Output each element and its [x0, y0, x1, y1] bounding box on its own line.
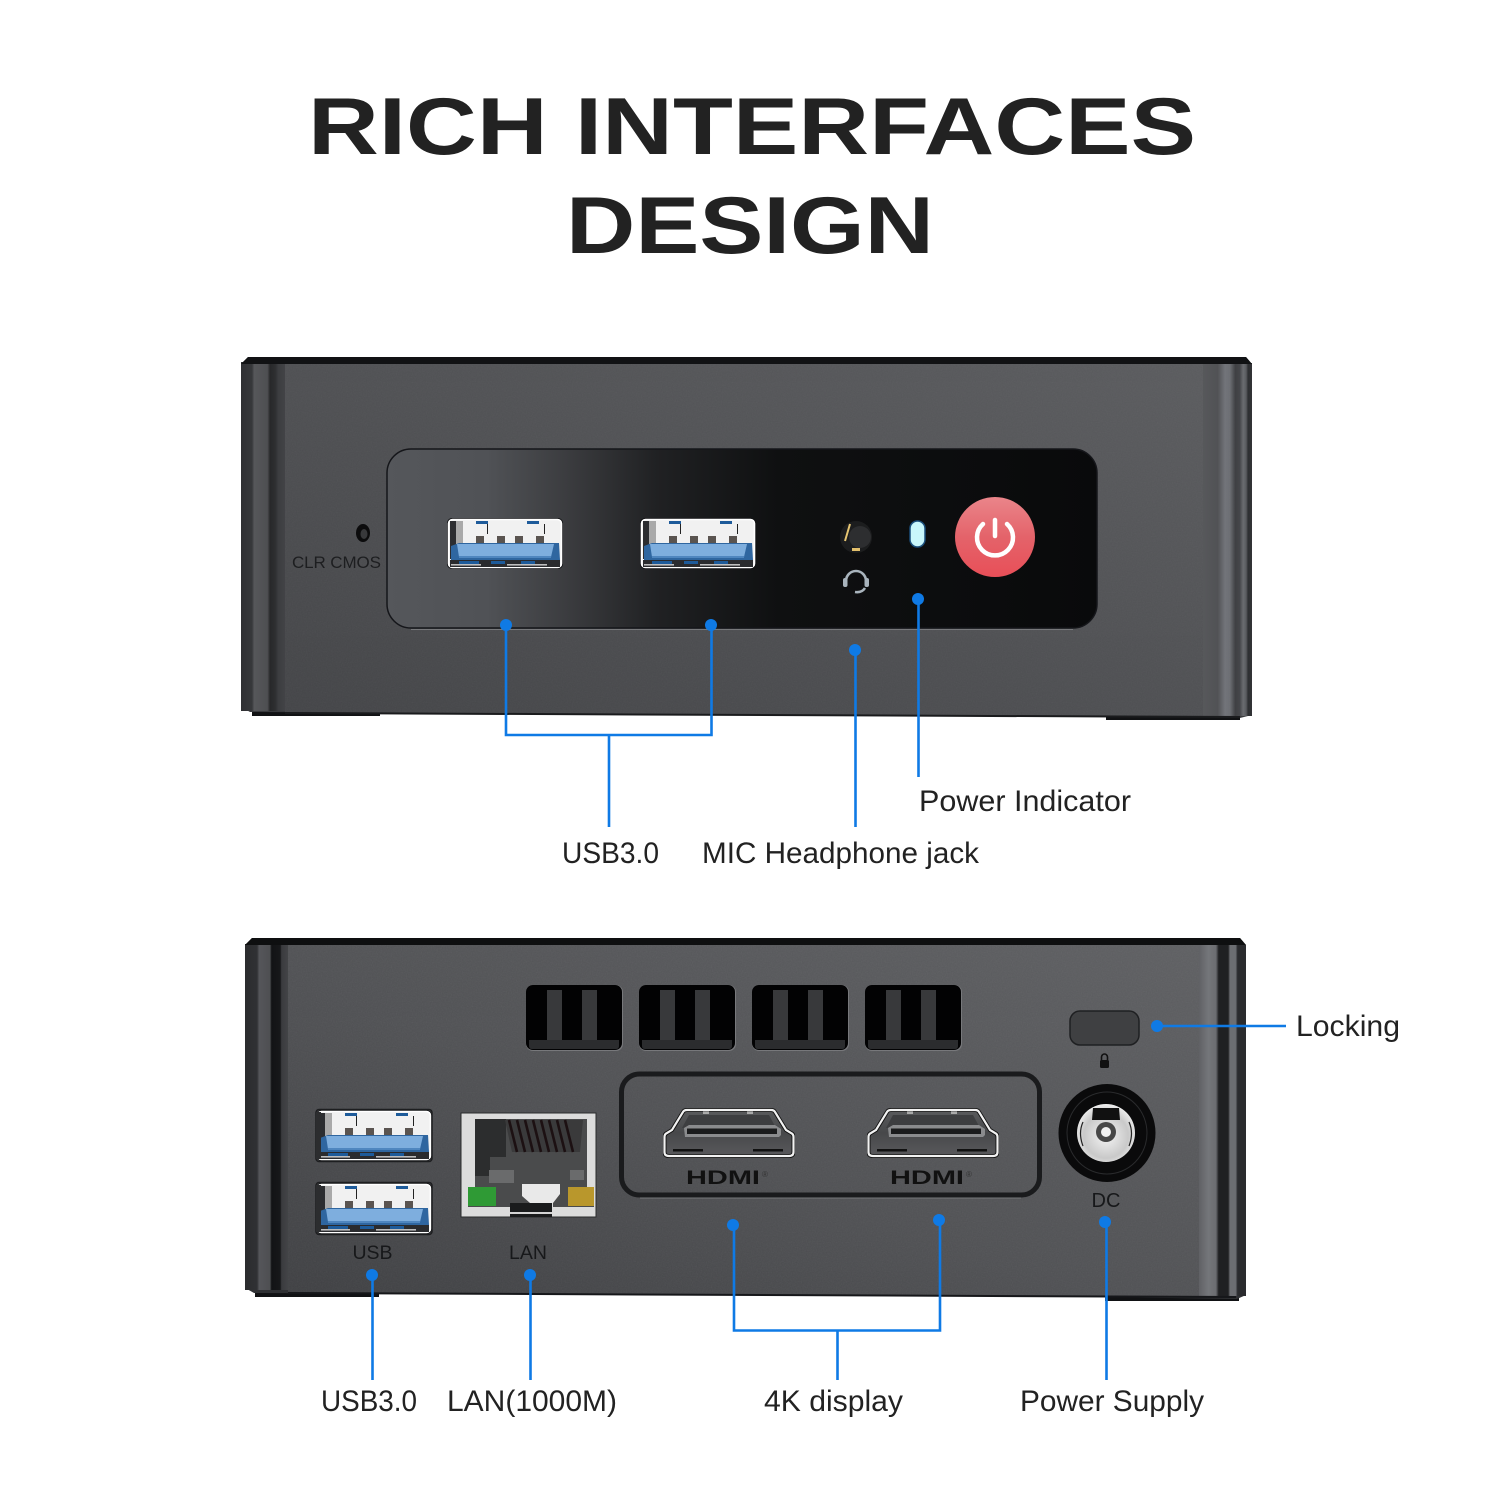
- usb port 1: [447, 518, 563, 569]
- hdmi port 1: HDMI: [686, 1168, 760, 1189]
- callout: 4k display: [727, 1214, 945, 1418]
- lan silk label: LAN: [509, 1242, 547, 1264]
- usb port 2: [640, 518, 756, 569]
- lan port: [461, 1113, 596, 1217]
- rear chassis body: [245, 938, 1246, 1299]
- callout: mic headphone jack: [702, 644, 980, 870]
- callout: mic headphone jack: MIC Headphone jack: [702, 837, 980, 870]
- usb silk label: USB: [352, 1242, 393, 1264]
- callout: front usb3.0: USB3.0: [562, 837, 659, 870]
- icon: padlock: [1100, 1054, 1109, 1068]
- callout: power indicator: [912, 593, 1131, 818]
- hdmi port 1: [664, 1110, 794, 1189]
- callout: locking: [1151, 1010, 1400, 1043]
- rear usb ports: [316, 1110, 432, 1234]
- callout: lan: LAN(1000M): [447, 1385, 617, 1418]
- hdmi port 2: [868, 1110, 998, 1189]
- clr cmos label: CLR CMOS: [292, 553, 381, 572]
- lock slot: [1070, 1011, 1139, 1045]
- front feet: [252, 708, 1240, 720]
- rear feet: [255, 1288, 1239, 1301]
- callout: locking: Locking: [1296, 1010, 1400, 1043]
- callout: 4k display: 4K display: [764, 1385, 903, 1418]
- vents: [526, 985, 962, 1051]
- hdmi bracket: [622, 1074, 1040, 1198]
- callout: power indicator: Power Indicator: [919, 785, 1131, 818]
- panel: front mini PC: [241, 357, 1252, 720]
- icon: headset: [843, 571, 869, 592]
- power indicator led: [910, 521, 925, 547]
- hdmi port 2: HDMI: [890, 1168, 964, 1189]
- panel: rear mini PC: [245, 938, 1246, 1301]
- callout: front usb3.0: [500, 619, 717, 870]
- callout: rear usb3.0: [321, 1269, 417, 1418]
- callout: lan: [447, 1269, 617, 1418]
- title: [308, 82, 1196, 271]
- title: DESIGN: [566, 181, 934, 271]
- dc jack: [1058, 1084, 1156, 1182]
- hdmi port 2: ®: [966, 1170, 972, 1179]
- hdmi port 1: ®: [762, 1170, 768, 1179]
- callout: rear usb3.0: USB3.0: [321, 1385, 417, 1418]
- clr cmos hole: [356, 524, 370, 542]
- title: RICH INTERFACES: [308, 82, 1196, 172]
- front panel: [387, 449, 1097, 630]
- headphone jack: [840, 521, 872, 553]
- callout: power supply: [1020, 1216, 1204, 1418]
- front chassis body: [241, 357, 1252, 718]
- dc silk label: DC: [1092, 1190, 1120, 1212]
- callout: power supply: Power Supply: [1020, 1385, 1204, 1418]
- power button: [955, 497, 1035, 577]
